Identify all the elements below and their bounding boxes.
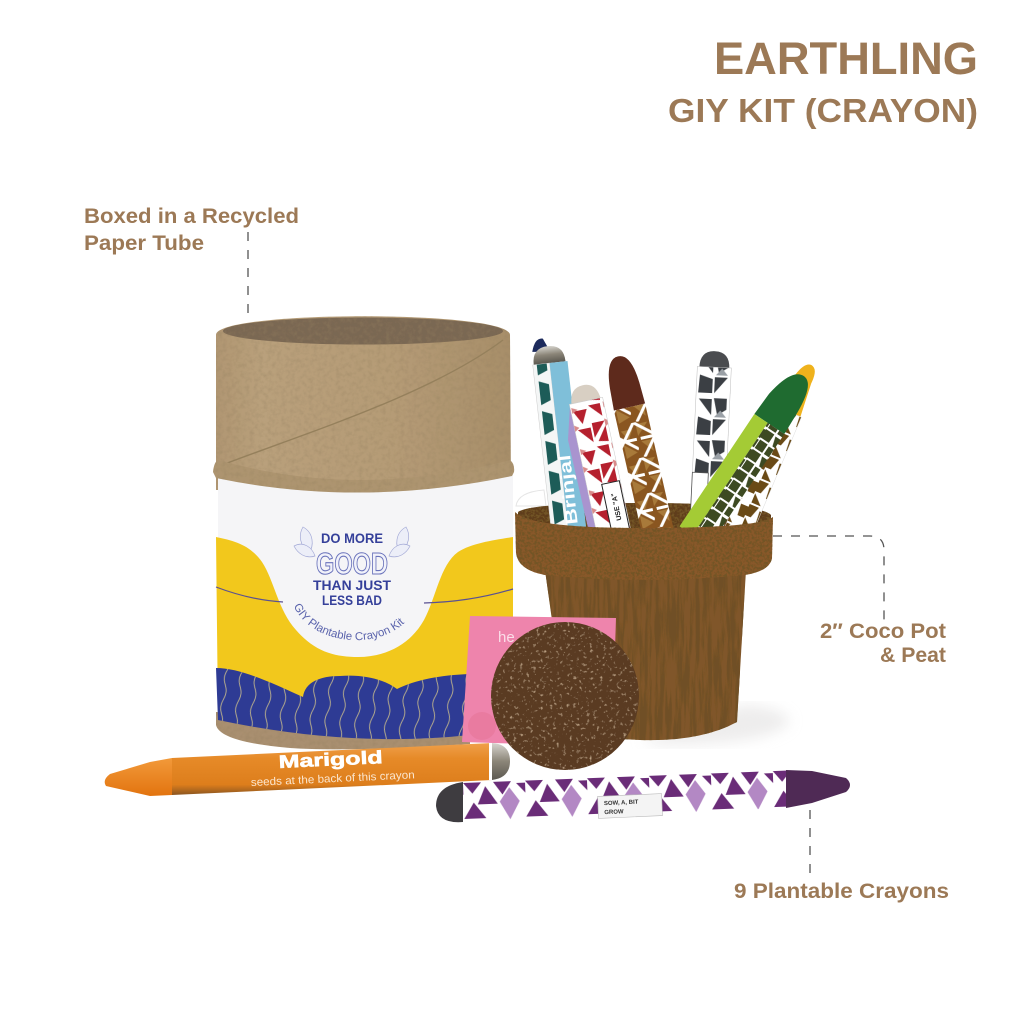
white stub behind pot <box>516 490 546 506</box>
callout: coco pot and peat <box>773 536 946 667</box>
spiral seam <box>222 340 503 465</box>
peat disc <box>491 622 639 770</box>
soft ground shadow <box>640 705 790 745</box>
label slogan: GOOD <box>316 546 388 581</box>
purple crayon <box>436 770 850 822</box>
purple crayon tag: GROW <box>604 809 624 816</box>
title <box>668 33 978 129</box>
callout: recycled paper tube: Paper Tube <box>84 232 204 255</box>
purple crayon behind red <box>568 405 606 528</box>
pot back rim <box>518 503 771 535</box>
callout: plantable crayons: 9 Plantable Crayons <box>734 880 949 903</box>
title: EARTHLING <box>714 33 978 84</box>
label rule <box>216 587 513 603</box>
tube bottom <box>216 712 470 749</box>
orange Marigold crayon <box>105 743 510 796</box>
yellow crayon <box>721 358 821 546</box>
coco pot <box>515 512 773 740</box>
callout: coco pot and peat: & Peat <box>880 644 946 667</box>
yellow band <box>216 537 513 730</box>
tube opening <box>223 318 503 344</box>
seed packet: he <box>498 629 515 646</box>
blue waves <box>216 668 470 739</box>
paper tube <box>213 316 554 790</box>
green crayon <box>679 365 817 546</box>
crayons standing in pot <box>530 336 821 546</box>
orange Marigold crayon: seeds at the back of this crayon <box>251 769 415 789</box>
label slogan <box>313 531 392 608</box>
label slogan: DO MORE <box>321 531 383 546</box>
callout: recycled paper tube: Boxed in a Recycled <box>84 205 299 228</box>
red crayon tag <box>602 481 631 537</box>
label slogan: LESS BAD <box>322 593 382 608</box>
purple crayon tag <box>598 794 662 818</box>
red crayon <box>566 382 632 541</box>
callout: recycled paper tube <box>84 205 299 316</box>
blue Brinjal crayon <box>530 336 587 539</box>
tube collar <box>213 460 514 493</box>
paper label <box>218 470 513 739</box>
title: GIY KIT (CRAYON) <box>668 92 978 129</box>
red crayon tag: USE "A" <box>611 492 623 521</box>
purple crayon tag: SOW, A, BIT <box>604 800 639 807</box>
orange Marigold crayon: Marigold <box>278 747 383 772</box>
blue Brinjal crayon: Brinjal <box>555 454 582 526</box>
pot rim <box>515 512 773 580</box>
brown crayon <box>602 353 675 542</box>
callout: coco pot and peat: 2″ Coco Pot <box>820 620 946 643</box>
curved kit text: GIY Plantable Crayon Kit <box>295 604 404 640</box>
pot body <box>545 570 746 740</box>
seed packet <box>462 616 616 745</box>
tube upper body <box>216 316 511 490</box>
black crayon <box>690 350 732 533</box>
leaf sprigs <box>294 527 410 557</box>
label slogan: THAN JUST <box>313 578 392 593</box>
